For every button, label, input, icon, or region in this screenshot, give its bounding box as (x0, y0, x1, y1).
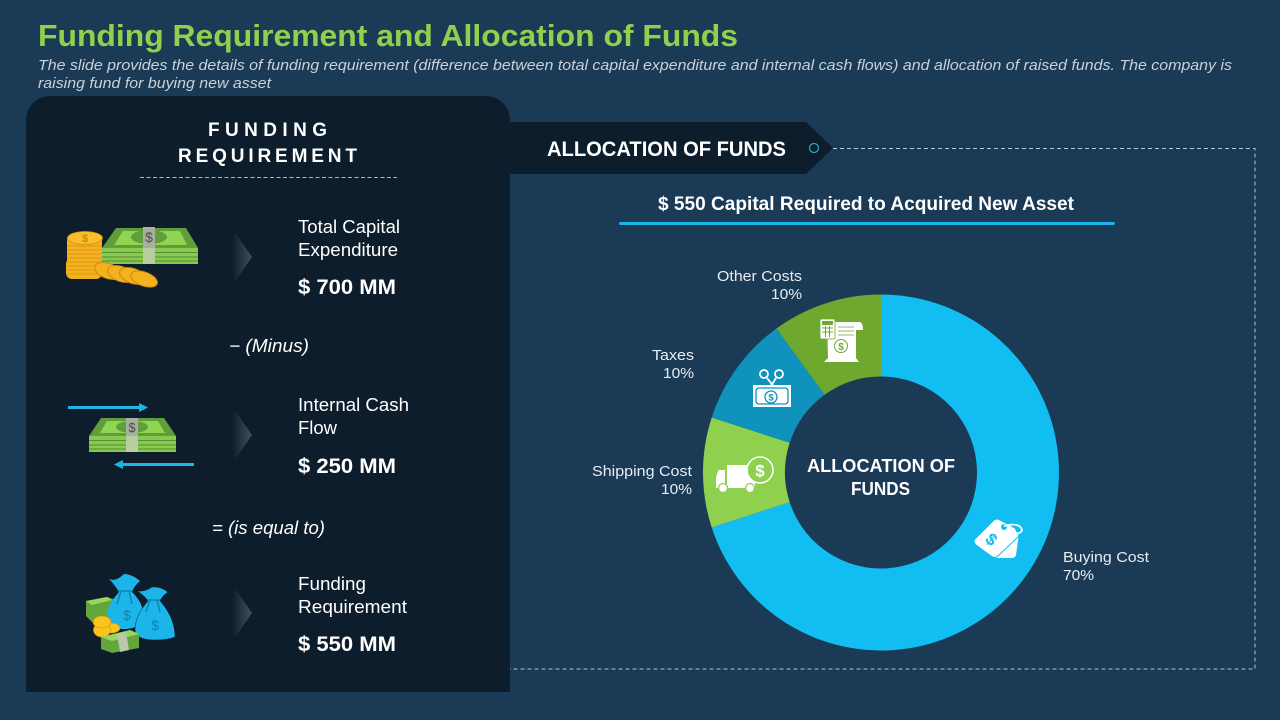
panel heading (178, 120, 357, 167)
donut centre label: FUNDS (851, 479, 910, 499)
item: internal cash flow: Flow (298, 418, 338, 438)
segment: other costs 10% (776, 294, 881, 395)
dollar sign on scissors note: $ (768, 392, 774, 404)
label: other costs: Other Costs (717, 268, 802, 285)
chart subheading: $ 550 Capital Required to Acquired New Asset (658, 194, 1075, 215)
dollar sign on receipt: $ (838, 342, 844, 353)
item: internal cash flow: $ 250 MM (298, 455, 396, 478)
label: other costs: 10% (771, 286, 802, 303)
subtitle description: The slide provides the details of funding requirement (difference between total capital expenditure and internal cash flows) and allocation of raised funds. The company is (38, 57, 1233, 74)
heading dashed rule (140, 176, 397, 178)
dashed frame around allocation chart (510, 148, 1255, 669)
chevron 3 (232, 590, 252, 636)
label: buying cost: 70% (1063, 567, 1094, 584)
item: total capital expenditure: Total Capital (298, 217, 400, 237)
operator: equals: = (is equal to) (212, 518, 325, 538)
item: funding requirement: Funding (298, 574, 366, 594)
item: total capital expenditure: $ 700 MM (298, 276, 396, 299)
item: total capital expenditure: Expenditure (298, 240, 398, 260)
donut centre label: ALLOCATION OF (807, 456, 955, 476)
item: internal cash flow (298, 395, 409, 478)
chart subheading (619, 194, 1115, 225)
item: internal cash flow: Internal Cash (298, 395, 409, 415)
donut centre label (807, 456, 955, 499)
label: taxes (652, 347, 694, 382)
icon: delivery truck (716, 457, 773, 492)
label: buying cost: Buying Cost (1063, 549, 1150, 566)
label: other costs (717, 268, 802, 303)
donut chart (703, 294, 1059, 651)
dollar sign on bag 1: $ (123, 607, 131, 623)
icon: coins and cash (66, 227, 198, 290)
icon: price tag (974, 519, 1022, 558)
title: Funding Requirement and Allocation of Funds (38, 18, 738, 53)
label: buying cost (1063, 549, 1150, 584)
dollar sign on coin stack: $ (82, 233, 88, 245)
segment: buying cost 70% (712, 294, 1059, 651)
icon: money bags (86, 574, 175, 653)
operator: minus: − (Minus) (229, 336, 309, 356)
icon: cash with flow arrows (68, 403, 194, 469)
subtitle description (38, 57, 1233, 92)
banner: allocation of funds: ALLOCATION OF FUNDS (547, 138, 786, 161)
chevron 1 (232, 234, 252, 280)
label: shipping cost: Shipping Cost (592, 463, 693, 480)
label: taxes: Taxes (652, 347, 694, 364)
dollar sign on tag: $ (982, 529, 1001, 550)
panel: funding requirement (26, 96, 510, 692)
panel heading: FUNDING (208, 120, 327, 141)
segment: shipping cost 10% (703, 418, 790, 528)
segment: taxes 10% (712, 328, 825, 443)
icon: scissors cutting money (753, 370, 791, 407)
subtitle description: raising fund for buying new asset (38, 75, 272, 92)
chevron 2 (232, 412, 252, 458)
label: shipping cost (592, 463, 693, 498)
icon: receipt and calculator (820, 319, 863, 362)
banner: allocation of funds (510, 122, 833, 174)
item: funding requirement (298, 574, 407, 656)
dollar sign on banknote: $ (128, 420, 136, 435)
item: funding requirement: $ 550 MM (298, 633, 396, 656)
panel heading: REQUIREMENT (178, 146, 357, 167)
label: shipping cost: 10% (661, 481, 692, 498)
dollar sign on banknote: $ (145, 229, 153, 245)
item: total capital expenditure (298, 217, 400, 299)
dollar sign on bag 2: $ (151, 617, 159, 633)
dollar sign on truck: $ (755, 462, 765, 480)
label: taxes: 10% (663, 365, 694, 382)
item: funding requirement: Requirement (298, 597, 407, 617)
